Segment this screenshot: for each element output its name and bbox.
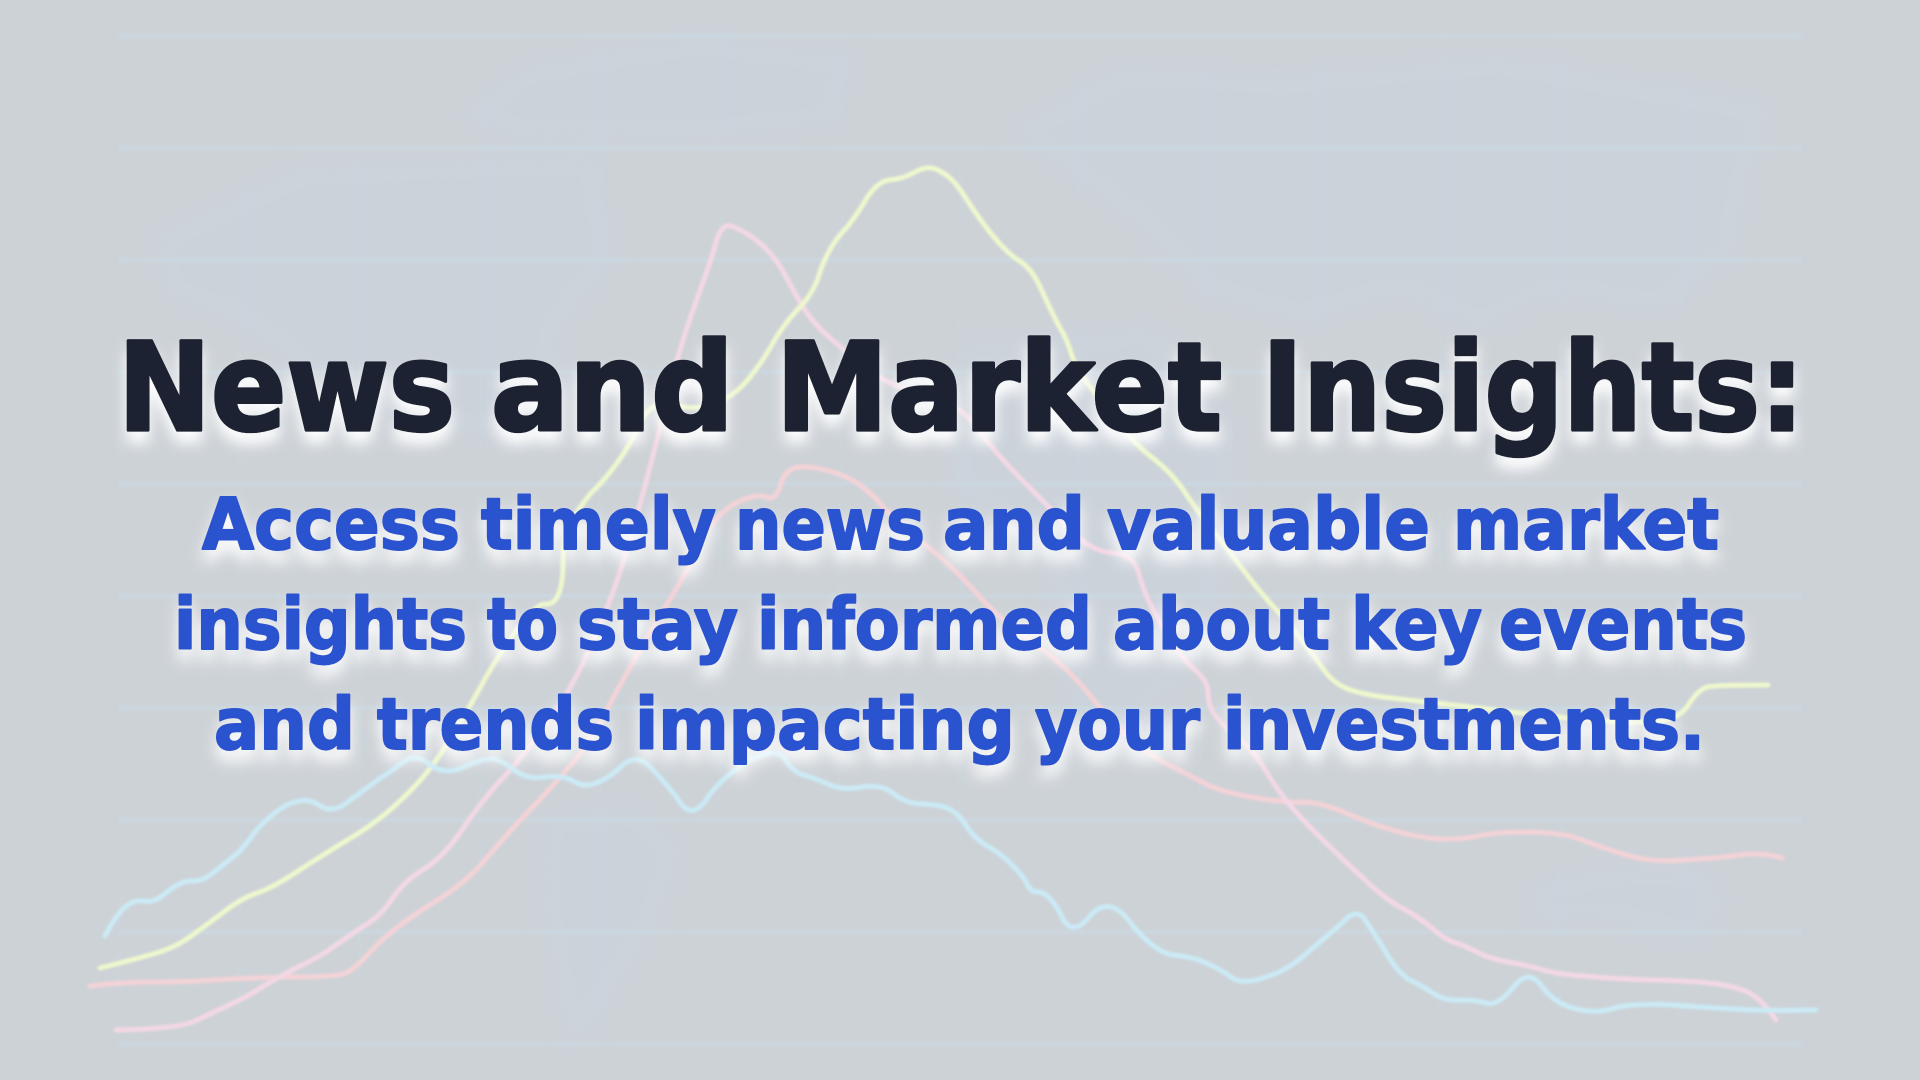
- title: Market: [776, 317, 1222, 459]
- subtitle: your: [1035, 683, 1200, 766]
- background line chart: [90, 168, 1816, 1030]
- subtitle: key: [1351, 583, 1482, 666]
- title: News: [118, 317, 455, 459]
- subtitle: and: [214, 683, 355, 766]
- yellow series: [100, 168, 1768, 968]
- title: Insights:: [1262, 317, 1804, 459]
- pink series: [116, 226, 1776, 1030]
- subtitle: market: [1453, 483, 1719, 566]
- subtitle: and: [943, 483, 1085, 566]
- subtitle: events: [1499, 583, 1747, 666]
- subtitle: valuable: [1107, 483, 1430, 566]
- subtitle: impacting: [635, 683, 1015, 766]
- salmon series: [90, 467, 1782, 986]
- subtitle: news: [735, 483, 925, 566]
- subtitle: Access: [202, 483, 460, 566]
- subtitle: insights: [174, 583, 467, 666]
- subtitle: about: [1113, 583, 1330, 666]
- blue series: [105, 753, 1816, 1011]
- subtitle: [174, 483, 1747, 766]
- title: and: [491, 317, 734, 459]
- subtitle: stay: [577, 583, 738, 666]
- subtitle: to: [487, 583, 558, 666]
- subtitle: timely: [481, 483, 716, 566]
- title: [118, 317, 1804, 459]
- subtitle: informed: [757, 583, 1092, 666]
- subtitle: investments.: [1223, 683, 1705, 766]
- subtitle: trends: [377, 683, 614, 766]
